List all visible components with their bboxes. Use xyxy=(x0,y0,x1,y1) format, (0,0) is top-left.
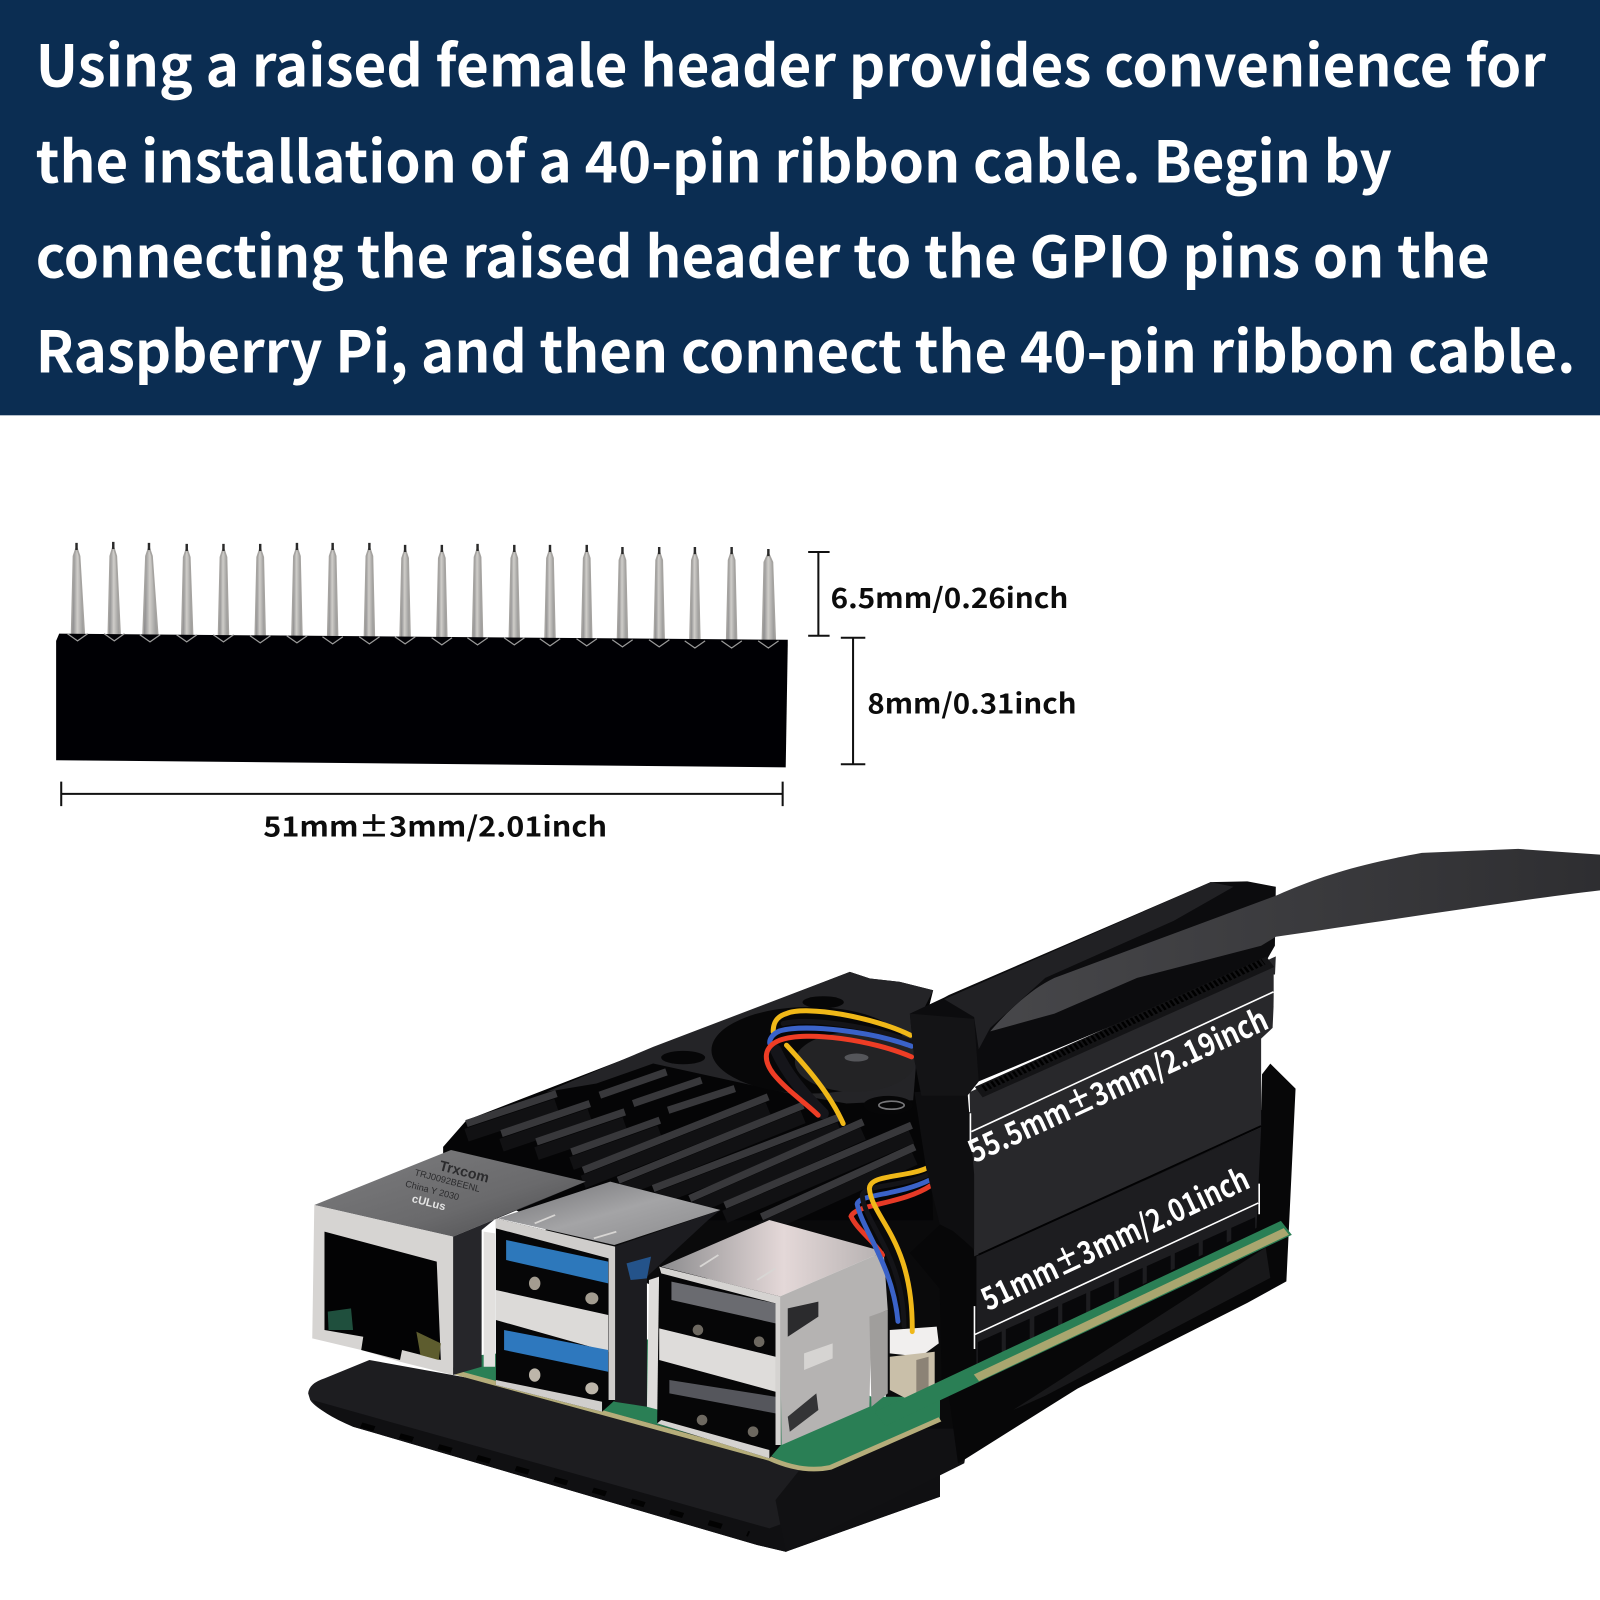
dimension: pin height xyxy=(808,552,1068,636)
heat sink ribs xyxy=(466,1072,915,1229)
ethernet jack xyxy=(312,1150,586,1375)
header text: Using a raised female header provides convenience for xyxy=(36,22,1546,104)
header text xyxy=(36,22,1576,389)
dimension: housing height: 8mm/0.31inch xyxy=(867,681,1077,721)
label on connector: 51mm xyxy=(972,1154,1259,1349)
pin tips xyxy=(77,542,768,556)
base plate of case xyxy=(308,1360,980,1552)
dimension: pin height: 6.5mm/0.26inch xyxy=(831,576,1068,616)
pin solder chevrons xyxy=(67,634,779,648)
left connector pillar xyxy=(914,1089,974,1249)
ports xyxy=(312,1150,939,1458)
black header housing xyxy=(56,634,788,767)
dark backing behind ports xyxy=(531,1112,985,1429)
raised female header product image xyxy=(56,542,788,767)
case frame xyxy=(910,1064,1296,1464)
ethernet jack label xyxy=(401,1151,491,1222)
ribbon cable xyxy=(990,849,1600,1031)
fan opening and hub xyxy=(711,1007,908,1094)
dimension: housing height xyxy=(841,638,1077,764)
ethernet jack label: China Y 2030 xyxy=(404,1179,460,1202)
connector top block xyxy=(910,881,1276,1096)
ethernet jack label: TRJ0092BEENL xyxy=(414,1167,481,1194)
ethernet jack label: Trxcom xyxy=(438,1158,491,1187)
ethernet jack label: cULus xyxy=(411,1193,447,1213)
connector body upper xyxy=(970,956,1276,1256)
Raspberry Pi assembly xyxy=(308,849,1600,1552)
dimension: header length: 51mm±3mm/2.01inch xyxy=(263,805,607,845)
USB 2 stack xyxy=(647,1220,888,1458)
header pins xyxy=(71,546,776,648)
header band xyxy=(0,0,1600,415)
fan connector xyxy=(890,1327,939,1402)
PCB top xyxy=(451,1330,940,1469)
label on connector: 55.5mm: 55.5mm±3mm/2.19inch xyxy=(960,995,1275,1172)
connector body lower xyxy=(976,1128,1261,1367)
lower fan wires xyxy=(851,1166,931,1332)
header text: the installation of a 40-pin ribbon cable. Begin by xyxy=(36,118,1392,200)
right case frame, connector body and ribbon xyxy=(880,849,1600,1464)
header text: connecting the raised header to the GPIO pins on the xyxy=(36,213,1490,295)
raised latch xyxy=(944,882,1234,1049)
header text: Raspberry Pi, and then connect the 40-pin ribbon cable. xyxy=(36,307,1576,389)
label on connector: 51mm: 51mm±3mm/2.01inch xyxy=(972,1154,1256,1320)
USB 3 stack xyxy=(484,1182,720,1412)
connector serrated contact row xyxy=(979,962,1270,1092)
heat sink xyxy=(443,972,933,1229)
dimension: header length xyxy=(61,782,783,845)
fan wires xyxy=(766,1011,912,1124)
connector slots xyxy=(978,1217,1255,1367)
PCB edge strip xyxy=(880,1228,1286,1419)
